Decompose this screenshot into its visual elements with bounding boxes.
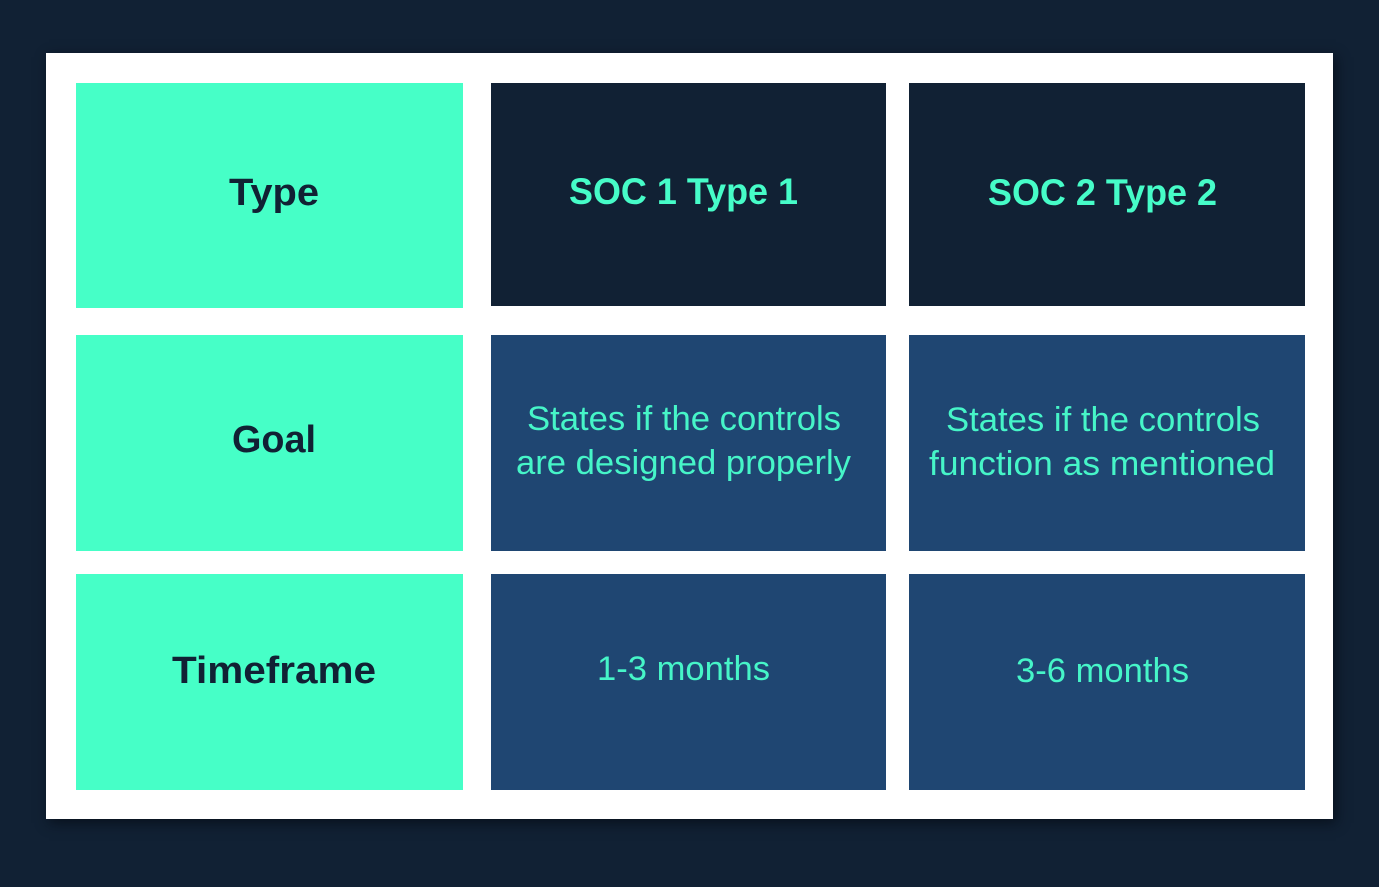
cell: SOC 2 goal: function as mentioned (929, 445, 1275, 483)
cell: SOC 1 goal (491, 335, 886, 551)
cell: SOC 1 goal: are designed properly (516, 444, 851, 482)
cell: SOC 2 goal (909, 335, 1305, 551)
row header: Timeframe (76, 574, 463, 790)
cell: SOC 1 goal: States if the controls (527, 400, 841, 438)
column header: SOC 2 Type 2: SOC 2 Type 2 (988, 172, 1217, 213)
cell: SOC 2 timeframe (909, 574, 1305, 790)
cell: SOC 2 goal: States if the controls (946, 401, 1260, 439)
cell: SOC 1 timeframe: 1-3 months (597, 650, 770, 688)
row header: Timeframe: Timeframe (172, 650, 376, 692)
column header: SOC 2 Type 2 (909, 83, 1305, 306)
cell: SOC 1 timeframe (491, 574, 886, 790)
column header: SOC 1 Type 1 (491, 83, 886, 306)
row header: Goal: Goal (232, 419, 316, 461)
row header: Goal (76, 335, 463, 551)
row header: Type: Type (229, 172, 319, 214)
cell: SOC 2 timeframe: 3-6 months (1016, 652, 1189, 690)
column header: SOC 1 Type 1: SOC 1 Type 1 (569, 171, 798, 212)
row header: Type (76, 83, 463, 308)
